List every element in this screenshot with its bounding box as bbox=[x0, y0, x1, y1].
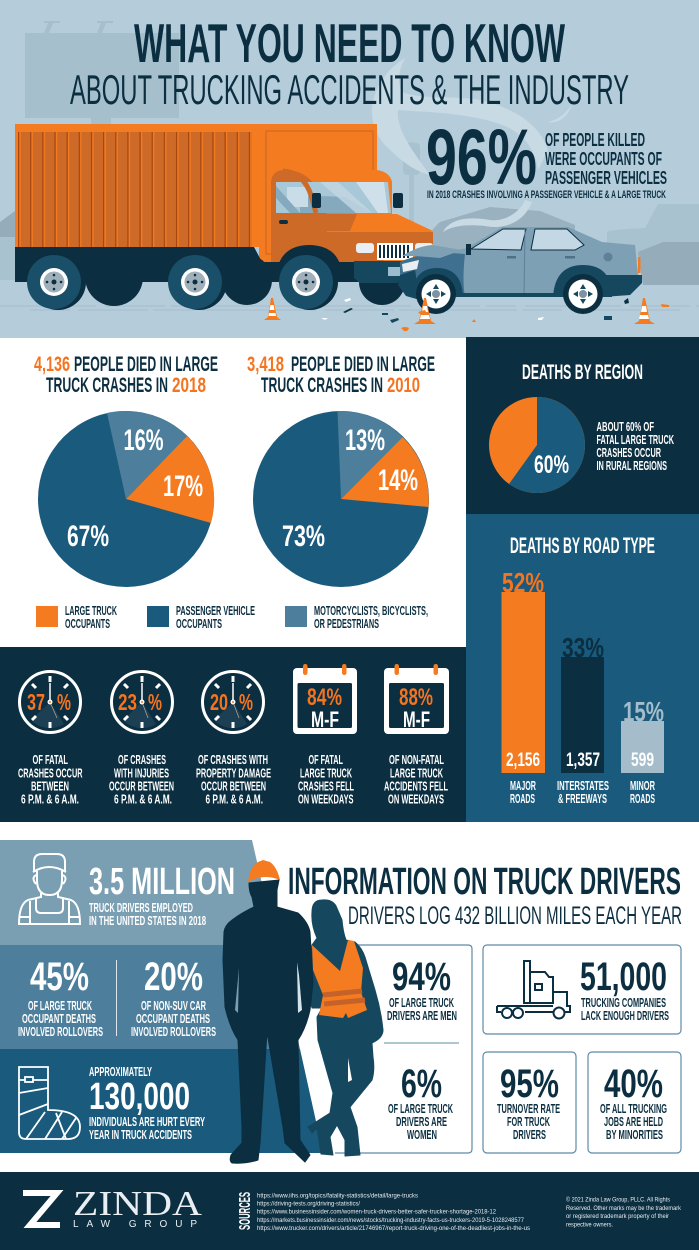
legend: OCCUPANTS bbox=[176, 616, 222, 631]
bar: interstates: & FREEWAYS bbox=[558, 791, 607, 806]
heading 2018: PEOPLE DIED IN LARGE bbox=[74, 353, 218, 376]
heading 2018: TRUCK CRASHES IN bbox=[46, 374, 168, 397]
panel: left driver statistics bands bbox=[0, 840, 323, 1153]
panel: footer: SOURCES bbox=[237, 1192, 254, 1230]
truck bbox=[15, 124, 433, 310]
caption column 2: WITH INJURIES bbox=[114, 766, 169, 780]
bar: interstates: 33% bbox=[562, 632, 604, 663]
heading 2010: 3,418 bbox=[247, 353, 284, 376]
heading 2018: 2018 bbox=[172, 374, 206, 397]
bar: interstates: INTERSTATES bbox=[557, 778, 609, 793]
bar: interstates bbox=[557, 632, 609, 806]
clock 20% bbox=[202, 672, 264, 732]
cargo box bbox=[15, 124, 377, 264]
pie chart 2018: 16% bbox=[124, 424, 164, 457]
pie chart 2010: 14% bbox=[378, 464, 418, 497]
stat: 3.5 million: 3.5 MILLION bbox=[89, 861, 235, 903]
caption column 3: OCCUR BETWEEN bbox=[201, 778, 266, 794]
bar: minor roads bbox=[621, 696, 664, 806]
legend bbox=[36, 603, 428, 631]
sources list: https://www.businessinsider.com/women-truck-drivers-better-safer-trucker-shortage-2018-12 bbox=[257, 1208, 496, 1216]
traffic cones bbox=[264, 298, 655, 324]
pie chart 2010: 73% bbox=[282, 520, 325, 553]
caption column 5: LARGE TRUCK bbox=[390, 766, 443, 780]
clock 23%: 23 bbox=[118, 689, 137, 715]
box: gender statistics: WOMEN bbox=[407, 1127, 437, 1142]
caption column 5: ON WEEKDAYS bbox=[388, 792, 444, 806]
caption column 4: LARGE TRUCK bbox=[300, 766, 352, 780]
car body bbox=[403, 227, 642, 297]
pie chart 2010: 13% bbox=[345, 424, 385, 457]
car skirt and arches bbox=[412, 265, 642, 297]
stat: 130,000: APPROXIMATELY bbox=[89, 1064, 152, 1079]
box: 95% turnover: DRIVERS bbox=[513, 1127, 546, 1142]
panel: time and weekday statistics bbox=[0, 647, 466, 822]
box: 95% turnover: TURNOVER RATE bbox=[497, 1101, 560, 1116]
title bbox=[70, 12, 629, 113]
cab window bbox=[276, 171, 391, 213]
box: 51,000 companies: 51,000 bbox=[580, 955, 667, 999]
caption column 2: 6 P.M. & 6 A.M. bbox=[114, 792, 172, 806]
cab bbox=[271, 170, 433, 262]
billboard background bbox=[25, 21, 179, 125]
clock 20%: 20 bbox=[210, 689, 228, 715]
box: 40% minorities bbox=[588, 1052, 681, 1153]
clock 37%: 37 bbox=[27, 689, 45, 715]
bar: interstates: 1,357 bbox=[566, 750, 600, 771]
box: 95% turnover bbox=[483, 1052, 576, 1153]
stat: 130,000: YEAR IN TRUCK ACCIDENTS bbox=[89, 1127, 192, 1142]
stat: 20%: OCCUPANT DEATHS bbox=[136, 1011, 210, 1026]
stat: 45% bbox=[18, 955, 103, 1039]
calendar 88%: M-F bbox=[403, 707, 430, 732]
caption column 2: OCCUR BETWEEN bbox=[109, 778, 174, 794]
heading 2018 bbox=[34, 353, 218, 397]
box: gender statistics: 6% bbox=[401, 1062, 442, 1106]
caption column 5: ACCIDENTS FELL bbox=[384, 778, 448, 794]
chassis bbox=[15, 247, 360, 282]
rear axle wheels shadow bbox=[85, 248, 405, 306]
pie chart 2010 bbox=[253, 411, 429, 587]
bar: minor roads: 599 bbox=[631, 750, 654, 771]
stat: 130,000: 130,000 bbox=[89, 1076, 190, 1118]
pie chart 2018: 17% bbox=[163, 470, 203, 503]
heading 2018: 4,136 bbox=[34, 353, 70, 376]
clock 37%: % bbox=[57, 689, 71, 715]
bumper bbox=[354, 261, 405, 283]
stat: 20% bbox=[131, 955, 216, 1039]
logo: Zinda Law Group: ZINDA bbox=[73, 1184, 203, 1223]
box: gender statistics: OF LARGE TRUCK bbox=[389, 995, 454, 1010]
box: 95% turnover: FOR TRUCK bbox=[507, 1114, 550, 1129]
stat: 45%: OF LARGE TRUCK bbox=[28, 998, 92, 1013]
mirrors and handle bbox=[279, 193, 403, 224]
pie chart 2018: 67% bbox=[67, 520, 109, 553]
clock 37% bbox=[20, 672, 80, 732]
wheels bbox=[27, 245, 342, 310]
sources list: https://www.trucker.com/drivers/article/21746967/report-truck-driving-one-of-the-deadliest-jobs-in-the-us bbox=[257, 1225, 531, 1232]
copyright: © 2021 Zinda Law Group, PLLC. All Rights bbox=[566, 1196, 670, 1204]
sources list: https://driving-tests.org/driving-statistics/ bbox=[257, 1200, 360, 1208]
clock 20%: % bbox=[239, 689, 253, 715]
icon: truck driver bbox=[19, 854, 80, 924]
panel: deaths by region bbox=[466, 337, 699, 514]
bar: minor roads: 15% bbox=[623, 696, 664, 727]
callout: 96%: 96% bbox=[426, 112, 537, 201]
caption column 3 bbox=[196, 752, 271, 806]
bar: major roads: ROADS bbox=[510, 791, 535, 806]
bar: major roads: MAJOR bbox=[510, 778, 536, 793]
stat: 45%: OCCUPANT DEATHS bbox=[22, 1011, 96, 1026]
calendar 88%: 88% bbox=[399, 684, 433, 711]
caption column 2: OF CRASHES bbox=[118, 752, 166, 767]
road skid marks bbox=[0, 306, 699, 310]
caption column 2 bbox=[109, 752, 174, 806]
legend: OCCUPANTS bbox=[65, 616, 110, 631]
car wheels bbox=[416, 274, 603, 314]
safety vest bbox=[312, 940, 367, 1018]
traffic light bbox=[403, 142, 420, 225]
heading 2010: 2010 bbox=[387, 374, 420, 397]
logo: Zinda Law Group bbox=[22, 1184, 203, 1230]
heading 2010: TRUCK CRASHES IN bbox=[261, 374, 383, 397]
panel: hero scene bbox=[0, 0, 699, 338]
region pie bbox=[489, 397, 585, 493]
calendar 84% bbox=[293, 664, 357, 734]
caption column 3: 6 P.M. & 6 A.M. bbox=[206, 792, 263, 806]
caption column 5 bbox=[384, 752, 448, 806]
caption column 1: 6 P.M. & 6 A.M. bbox=[21, 792, 79, 806]
copyright: or registered trademark property of their bbox=[566, 1213, 670, 1220]
legend: OR PEDESTRIANS bbox=[314, 616, 379, 631]
caption column 4: ON WEEKDAYS bbox=[298, 792, 354, 806]
illustration: woman silhouette bbox=[308, 900, 383, 1156]
stat: 130,000 bbox=[89, 1064, 205, 1142]
bar: major roads bbox=[502, 567, 545, 806]
crumpled hood and fender bbox=[398, 245, 465, 300]
icon: leg cast bbox=[19, 1067, 80, 1139]
logo: Zinda Law Group: LAW GROUP bbox=[73, 1219, 202, 1230]
caption column 1 bbox=[18, 752, 83, 806]
legend: PASSENGER VEHICLE bbox=[176, 603, 255, 618]
caption column 4 bbox=[298, 752, 354, 806]
clock 23% bbox=[112, 672, 172, 732]
callout: 96% bbox=[426, 112, 667, 201]
panel: pie charts comparison bbox=[0, 338, 466, 647]
caption column 4: CRASHES FELL bbox=[298, 778, 354, 794]
box: gender statistics: OF LARGE TRUCK bbox=[388, 1101, 453, 1116]
bar: minor roads: MINOR bbox=[630, 778, 655, 793]
smoke bbox=[372, 58, 573, 232]
caption column 3: OF CRASHES WITH bbox=[198, 752, 268, 767]
box: gender statistics: DRIVERS ARE MEN bbox=[387, 1008, 457, 1023]
copyright bbox=[566, 1196, 681, 1228]
sources list: https://www.iihs.org/topics/fatality-statistics/detail/large-trucks bbox=[257, 1192, 419, 1200]
car bbox=[398, 227, 642, 314]
caption column 1: BETWEEN bbox=[31, 778, 69, 794]
hard hat bbox=[248, 860, 280, 882]
box: gender statistics: DRIVERS ARE bbox=[396, 1114, 447, 1129]
sources list: https://markets.businessinsider.com/news/stocks/trucking-industry-facts-us-truckers-2019-5-1028248577 bbox=[257, 1217, 524, 1224]
caption column 3: PROPERTY DAMAGE bbox=[196, 766, 271, 780]
bar: major roads: 52% bbox=[502, 567, 544, 598]
stat: 20%: OF NON-SUV CAR bbox=[141, 998, 206, 1013]
grille and headlights bbox=[356, 243, 433, 260]
stat: 3.5 million: TRUCK DRIVERS EMPLOYED bbox=[89, 900, 193, 915]
legend: LARGE TRUCK bbox=[65, 603, 117, 618]
heading 2010 bbox=[247, 353, 435, 397]
calendar 88% bbox=[384, 664, 449, 734]
calendar 84%: 84% bbox=[307, 684, 342, 711]
region description bbox=[596, 419, 674, 473]
region description: ABOUT 60% OF bbox=[596, 419, 654, 434]
copyright: respective owners. bbox=[566, 1221, 613, 1228]
box: 95% turnover: 95% bbox=[500, 1062, 559, 1106]
crash debris bbox=[321, 298, 669, 331]
stat: 20%: 20% bbox=[144, 955, 203, 999]
caption column 4: OF FATAL bbox=[308, 752, 343, 767]
pie chart 2018 bbox=[38, 411, 214, 587]
icon: semi truck bbox=[497, 961, 570, 1018]
stat: 45%: INVOLVED ROLLOVERS bbox=[18, 1024, 103, 1039]
stat: 130,000: INDIVIDUALS ARE HURT EVERY bbox=[89, 1114, 205, 1129]
caption column 1: OF FATAL bbox=[32, 752, 68, 767]
bar: major roads: 2,156 bbox=[506, 750, 540, 771]
background cars bbox=[0, 204, 699, 285]
panel: footer bbox=[0, 1172, 699, 1250]
region pie: 60% bbox=[534, 451, 569, 479]
legend: MOTORCYCLISTS, BICYCLISTS, bbox=[314, 603, 428, 618]
stat: 3.5 million bbox=[89, 861, 235, 928]
stat: 20%: INVOLVED ROLLOVERS bbox=[131, 1024, 216, 1039]
bar: minor roads: ROADS bbox=[630, 791, 655, 806]
illustration: man silhouette bbox=[223, 860, 313, 1163]
car windows bbox=[471, 229, 584, 250]
car details bbox=[447, 228, 640, 297]
panel: deaths by road type bbox=[466, 514, 699, 822]
heading 2010: PEOPLE DIED IN LARGE bbox=[291, 353, 435, 376]
clock 23%: % bbox=[148, 689, 162, 715]
box: gender statistics bbox=[335, 945, 472, 1153]
stat: 3.5 million: IN THE UNITED STATES IN 2018 bbox=[89, 913, 206, 928]
calendar 84%: M-F bbox=[311, 707, 339, 732]
caption column 5: OF NON-FATAL bbox=[389, 752, 444, 767]
heading: information on truck drivers bbox=[288, 861, 682, 930]
box: 40% minorities: 40% bbox=[604, 1062, 663, 1106]
box: gender statistics: 94% bbox=[392, 955, 451, 999]
caption column 1: CRASHES OCCUR bbox=[18, 766, 83, 780]
sources list bbox=[257, 1192, 531, 1232]
stat: 45%: 45% bbox=[30, 955, 89, 999]
box: 51,000 companies bbox=[483, 945, 681, 1034]
